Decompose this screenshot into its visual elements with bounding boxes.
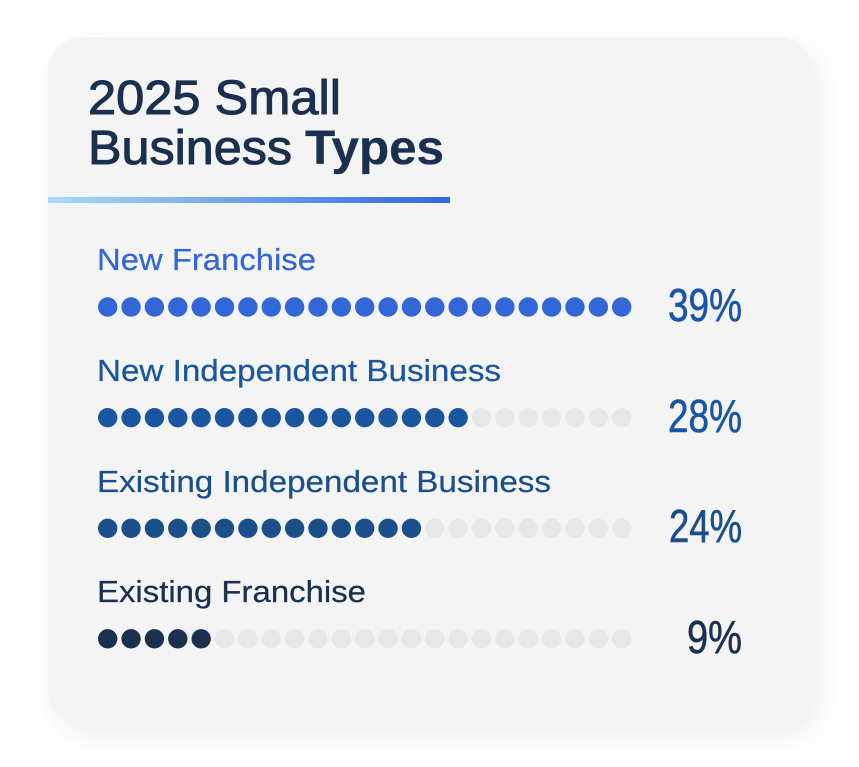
title underline gradient bar xyxy=(48,197,450,203)
row: Existing Franchise xyxy=(97,574,742,663)
row: New Franchise: New Franchise xyxy=(97,242,316,277)
row: Existing Independent Business: Existing Independent Business xyxy=(97,464,551,499)
title: Types xyxy=(305,122,444,175)
row: New Franchise: 39% xyxy=(668,279,742,331)
row: Existing Franchise: 9% xyxy=(687,611,742,663)
row: New Independent Business: 28% xyxy=(668,390,742,442)
row: Existing Franchise: Existing Franchise xyxy=(97,574,366,609)
row: New Independent Business xyxy=(97,353,742,442)
row: Existing Independent Business xyxy=(97,464,742,552)
row: New Independent Business: New Independent Business xyxy=(97,353,501,388)
title: 2025 Small xyxy=(88,72,341,125)
row: New Franchise xyxy=(97,242,742,331)
panel: card background xyxy=(48,37,812,725)
title xyxy=(88,72,444,175)
title: Business xyxy=(88,122,292,175)
row: Existing Independent Business: 24% xyxy=(669,500,742,552)
